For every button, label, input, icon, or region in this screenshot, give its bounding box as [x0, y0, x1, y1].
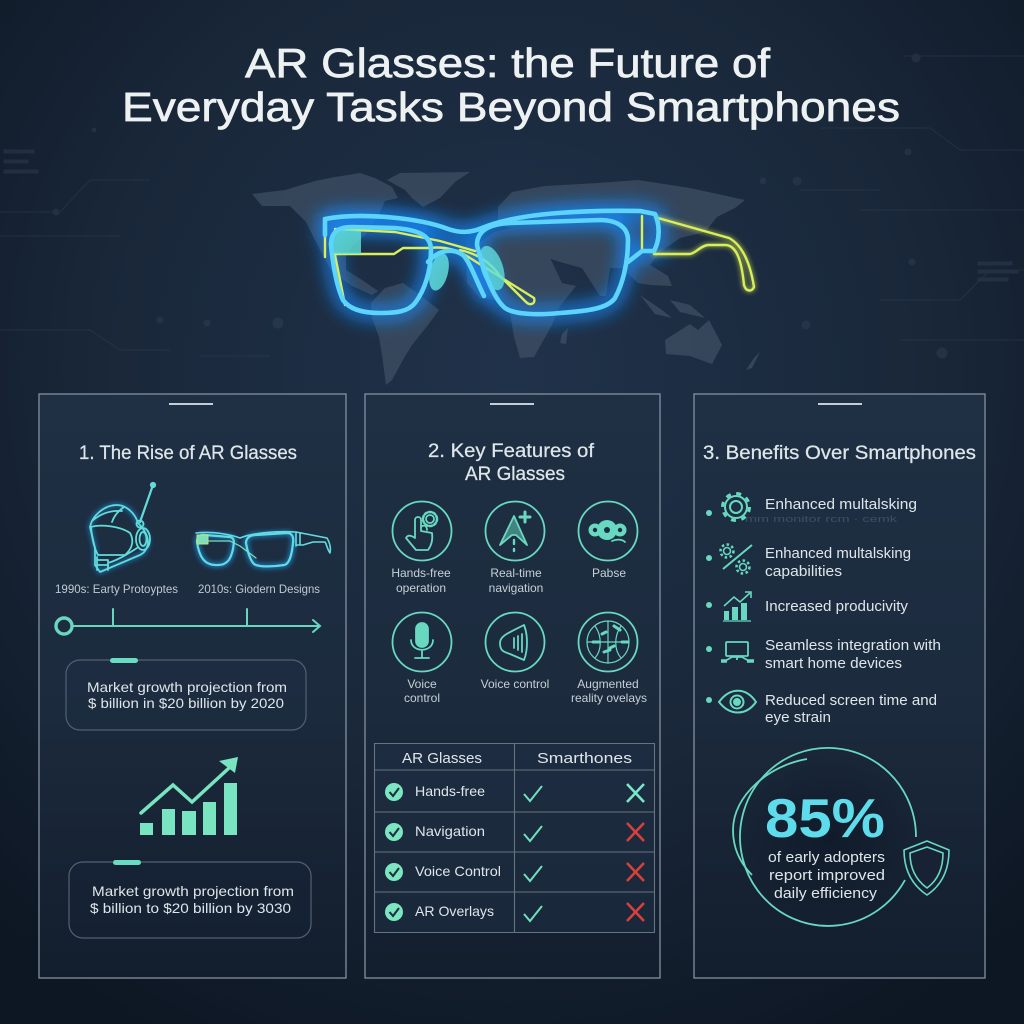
benefits text: Seamless integration with: [765, 637, 941, 654]
callout: market growth 2030: $ billion to $20 billion by 3030: [90, 900, 291, 916]
icon: modern glasses: [196, 532, 330, 566]
nose pads and camera: [333, 230, 510, 293]
icon: microphone: [392, 612, 452, 672]
feature labels: Voice control: [481, 677, 549, 691]
panel 3: benefits: [694, 394, 985, 978]
title: AR Glasses: the Future of: [245, 40, 771, 86]
title: [122, 40, 900, 130]
benefits text: smart home devices: [765, 655, 902, 672]
benefits text: mm monitor rcm · cemk: [745, 514, 898, 524]
hero: neon AR glasses: [325, 211, 754, 314]
comparison table: AR Overlays: [415, 903, 494, 919]
stat ring: 85%: of early adopters: [768, 849, 885, 866]
icon: AR globe: [578, 612, 638, 672]
panel 2 heading: [428, 441, 595, 485]
feature labels: operation: [396, 581, 446, 595]
comparison table: Navigation: [415, 823, 485, 839]
panel 2: key features: [365, 394, 660, 978]
panel 2 heading: AR Glasses: [465, 464, 565, 485]
benefits text: capabilities: [765, 563, 842, 580]
timeline labels: 1990s: Earty Protoyptes: [55, 582, 178, 596]
timeline labels: 2010s: Giodern Designs: [198, 582, 320, 596]
panel 1: the rise of AR glasses: [39, 394, 346, 978]
feature labels: reality ovelays: [571, 691, 647, 705]
bar chart with rising arrow: [140, 757, 238, 835]
icon: productivity chart: [723, 592, 751, 621]
icon: eye: [719, 691, 756, 712]
feature labels: [391, 566, 647, 705]
world map: [252, 172, 760, 385]
temples and yellow lines: [325, 216, 754, 305]
callout: market growth 2020: [66, 658, 306, 730]
icon: pause: [578, 502, 638, 560]
panel 3 heading: 3. Benefits Over Smartphones: [703, 443, 976, 464]
icon: tuning gears: [720, 544, 752, 574]
callout: market growth 2020: $ billion in $20 billion by 2020: [88, 695, 284, 711]
panel 2 heading: 2. Key Features of: [428, 441, 595, 462]
benefits text: Enhanced multalsking: [765, 496, 917, 513]
benefits text: Enhanced multalsking: [765, 545, 911, 562]
comparison table: AR Glasses: [402, 750, 482, 767]
callout: market growth 2030: Market growth projection from: [92, 883, 294, 899]
panel 1 heading: 1. The Rise of AR Glasses: [79, 443, 297, 464]
icon: early prototype helmet: [90, 483, 155, 572]
stat ring: 85%: [733, 743, 925, 933]
feature labels: Hands-free: [391, 566, 451, 580]
feature labels: navigation: [489, 581, 543, 595]
icon: navigation: [486, 502, 544, 560]
feature labels: Voice: [407, 677, 437, 691]
feature labels: Augmented: [577, 677, 639, 691]
comparison table: [374, 743, 654, 932]
bullets: [706, 510, 712, 703]
stat ring: 85%: 85%: [765, 787, 885, 849]
feature labels: Real-time: [490, 566, 542, 580]
icon: gear: [722, 494, 750, 520]
icon: speaker: [486, 612, 544, 672]
stat ring: 85%: daily efficiency: [774, 885, 878, 902]
benefits text: eye strain: [765, 709, 831, 726]
feature labels: control: [404, 691, 440, 705]
timeline: [56, 609, 320, 634]
comparison table: Smarthones: [537, 750, 632, 767]
icon: devices: [721, 642, 754, 661]
icon: shield: [904, 841, 949, 895]
title: Everyday Tasks Beyond Smartphones: [122, 84, 900, 130]
comparison table: Voice Control: [415, 863, 501, 879]
callout: market growth 2030: [69, 860, 311, 938]
stat ring: 85%: report improved: [769, 867, 885, 884]
benefits text: Reduced screen time and: [765, 692, 937, 709]
comparison table: Hands-free: [415, 783, 485, 799]
callout: market growth 2020: Market growth projection from: [87, 679, 287, 695]
benefits text: [745, 496, 941, 726]
benefits text: Increased producivity: [765, 598, 908, 615]
icon: hands-free: [392, 502, 452, 560]
timeline labels: [55, 582, 320, 596]
feature labels: Pabse: [592, 566, 626, 580]
